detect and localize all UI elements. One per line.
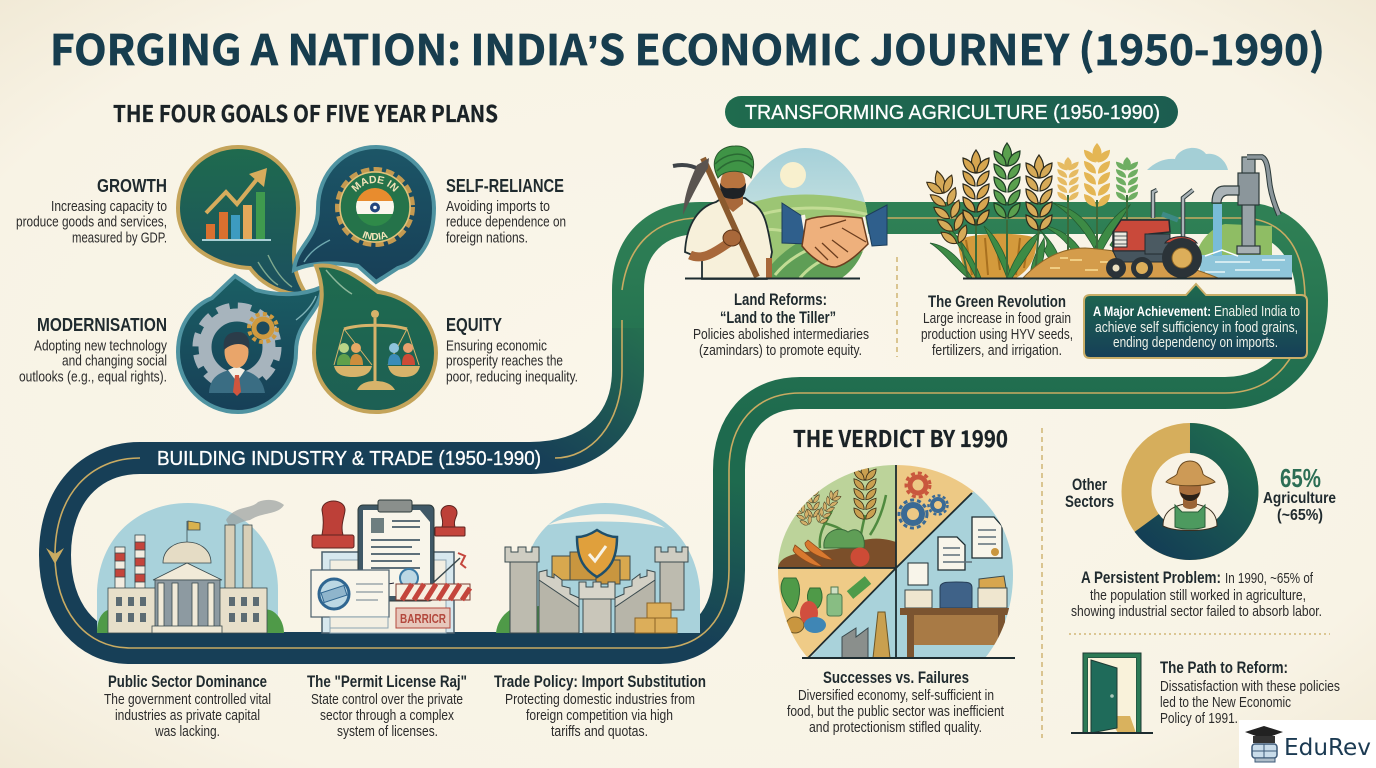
donut label: other sectors — [1065, 476, 1114, 511]
text block: persistent problem: the population still worked in agriculture, — [1090, 588, 1306, 604]
text block: self-reliance: foreign nations. — [446, 230, 528, 246]
journey road connecting the sections — [55, 218, 1312, 648]
text block: modernisation: MODERNISATION — [37, 314, 167, 335]
donut label: agriculture: 65% — [1280, 463, 1321, 493]
crops in upper quadrant — [778, 463, 896, 568]
illustration: successes vs failures pie — [770, 460, 1020, 660]
text block: self-reliance — [446, 175, 566, 246]
illustration: permit license raj documents — [311, 500, 470, 633]
text block: self-reliance: reduce dependence on — [446, 214, 566, 230]
text block: green revolution: Large increase in food grain — [923, 311, 1071, 327]
text block: modernisation: and changing social — [62, 354, 167, 370]
text block: permit license raj — [307, 673, 467, 740]
text block: growth: produce goods and services, — [16, 214, 167, 230]
text block: permit license raj: State control over the private — [311, 692, 463, 708]
text block: equity: EQUITY — [446, 314, 503, 335]
panel: four goals petals — [176, 145, 438, 414]
text block: successes vs failures: food, but the public sector was inefficient — [787, 704, 1004, 720]
text block: modernisation: Adopting new technology — [34, 338, 168, 354]
text block: self-reliance: SELF-RELIANCE — [446, 175, 564, 196]
road arrow chevron — [46, 548, 64, 564]
text block: growth: GROWTH — [97, 175, 167, 196]
text block: equity: Ensuring economic — [446, 338, 547, 354]
barrier sign — [396, 608, 450, 628]
farmer figure — [673, 146, 772, 279]
text block: green revolution: fertilizers, and irrigation. — [932, 343, 1062, 359]
text block: green revolution: production using HYV seeds, — [921, 327, 1073, 343]
text block: public sector dominance — [104, 673, 271, 740]
cloud — [1147, 148, 1228, 170]
divider — [896, 257, 898, 357]
donut chart: share of workforce — [1136, 438, 1244, 545]
text block: permit license raj: sector through a complex — [320, 708, 455, 724]
text block: trade policy: Protecting domestic industries from — [505, 692, 695, 708]
text block: successes vs failures: Successes vs. Failures — [823, 669, 969, 687]
grass by pump — [1196, 224, 1272, 255]
divider — [1041, 428, 1043, 738]
title: FORGING A NATION: INDIA’S ECONOMIC JOURNEY (1950-1990) — [50, 17, 1325, 78]
donut label: other sectors: Other — [1072, 476, 1107, 494]
text block: growth — [16, 175, 167, 246]
icon: farmer in donut — [1152, 454, 1228, 530]
donut label: agriculture — [1263, 463, 1336, 524]
text block: land reforms: Land Reforms: — [734, 291, 827, 309]
illustration: land reforms farmer and handshake — [673, 146, 887, 280]
tractor — [1106, 190, 1202, 279]
text block: land reforms: (zamindars) to promote equity. — [699, 343, 862, 359]
text block: successes vs failures: and protectionism stifled quality. — [809, 720, 982, 736]
text block: green revolution — [921, 293, 1073, 359]
text block: growth: measured by GDP. — [72, 230, 167, 246]
text block: green revolution: The Green Revolution — [928, 293, 1066, 311]
text block: path to reform: The Path to Reform: — [1160, 659, 1288, 677]
text block: public sector dominance: Public Sector Dominance — [108, 673, 267, 691]
text block: land reforms: “Land to the Tiller” — [720, 309, 836, 327]
donut label: agriculture: (~65%) — [1277, 507, 1323, 524]
text block: successes vs failures — [787, 669, 1004, 736]
red stamps — [322, 501, 345, 535]
icon: open door — [1071, 653, 1153, 733]
logo: EduRev — [1239, 720, 1376, 768]
text block: equity — [446, 314, 578, 386]
text block: modernisation: outlooks (e.g., equal rights). — [19, 370, 167, 386]
handshake — [782, 203, 887, 267]
text block: equity: poor, reducing inequality. — [446, 370, 578, 386]
illustration: public sector factory and capitol — [97, 500, 284, 633]
lower-left produce — [781, 578, 822, 612]
text block: path to reform: Policy of 1991. — [1160, 711, 1238, 727]
text block: path to reform: Dissatisfaction with these policies — [1160, 679, 1340, 695]
text block: permit license raj: system of licenses. — [337, 724, 438, 740]
illustration: import substitution fortress — [496, 503, 700, 633]
heading on road: building industry and trade: BUILDING INDUSTRY & TRADE (1950-1990) — [157, 448, 541, 470]
donut label: other sectors: Sectors — [1065, 493, 1114, 511]
text block: path to reform: led to the New Economic — [1160, 695, 1291, 711]
text block: self-reliance: Avoiding imports to — [446, 199, 550, 215]
office — [972, 517, 1002, 558]
dividers in pie — [778, 465, 972, 658]
text block: persistent problem: A Persistent Problem: — [1081, 569, 1221, 587]
text block: land reforms: Policies abolished intermediaries — [693, 327, 869, 343]
text block: public sector dominance: The government controlled vital — [104, 692, 271, 708]
icon: modernisation petal — [178, 276, 322, 412]
gears — [910, 477, 926, 493]
icon: self-reliance petal — [292, 145, 436, 284]
illustration: permit license raj documents: BARRICR — [400, 611, 446, 626]
factory — [842, 628, 868, 658]
icon: equity petal — [314, 265, 436, 412]
hand pump — [1205, 157, 1279, 256]
text block: trade policy: tariffs and quotas. — [551, 724, 648, 740]
barrier — [396, 584, 470, 600]
water pool — [1200, 255, 1292, 278]
text block: path to reform — [1160, 659, 1340, 727]
text block: permit license raj: The "Permit License Raj" — [307, 673, 467, 691]
heading: four goals: THE FOUR GOALS OF FIVE YEAR PLANS — [113, 95, 498, 129]
text block: equity: prosperity reaches the — [446, 354, 563, 370]
text block: public sector dominance: was lacking. — [154, 724, 220, 740]
text block: land reforms — [693, 291, 869, 359]
icon: self-reliance petal: MADE IN — [351, 176, 399, 192]
callout: major achievement: achieve self sufficiency in food grains, — [1095, 320, 1298, 336]
text block: growth: Increasing capacity to — [51, 199, 167, 215]
grain mound — [1023, 248, 1218, 278]
heading pill: transforming agriculture: TRANSFORMING AGRICULTURE (1950-1990) — [745, 102, 1160, 124]
callout: major achievement: A Major Achievement: — [1093, 303, 1211, 319]
callout: major achievement: Enabled India to — [1214, 304, 1300, 320]
text block: persistent problem: In 1990, ~65% of — [1225, 571, 1314, 587]
illustration: green revolution crops, tractor and pump — [925, 143, 1292, 279]
text block: successes vs failures: Diversified economy, self-sufficient in — [798, 688, 994, 704]
donut label: agriculture: Agriculture — [1263, 490, 1336, 507]
icon: growth petal — [178, 147, 306, 294]
divider — [1069, 633, 1330, 635]
icon: self-reliance petal: INDIA — [362, 231, 388, 240]
heading pill: transforming agriculture — [725, 96, 1178, 128]
heading: the verdict: THE VERDICT BY 1990 — [793, 420, 1008, 454]
callout: major achievement — [1084, 284, 1307, 358]
text block: modernisation — [19, 314, 168, 386]
text block: persistent problem — [1071, 569, 1322, 620]
text block: persistent problem: showing industrial sector failed to absorb labor. — [1071, 604, 1322, 620]
text block: trade policy: foreign competition via high — [526, 708, 673, 724]
text block: trade policy: Trade Policy: Import Substitution — [494, 673, 706, 691]
crops — [925, 143, 1140, 278]
logo: EduRev: EduRev — [1284, 735, 1371, 761]
text block: trade policy — [494, 673, 706, 740]
icon: graduation cap logo — [1245, 726, 1283, 762]
callout: major achievement: ending dependency on imports. — [1113, 335, 1278, 351]
text block: public sector dominance: industries as private capital — [115, 708, 260, 724]
